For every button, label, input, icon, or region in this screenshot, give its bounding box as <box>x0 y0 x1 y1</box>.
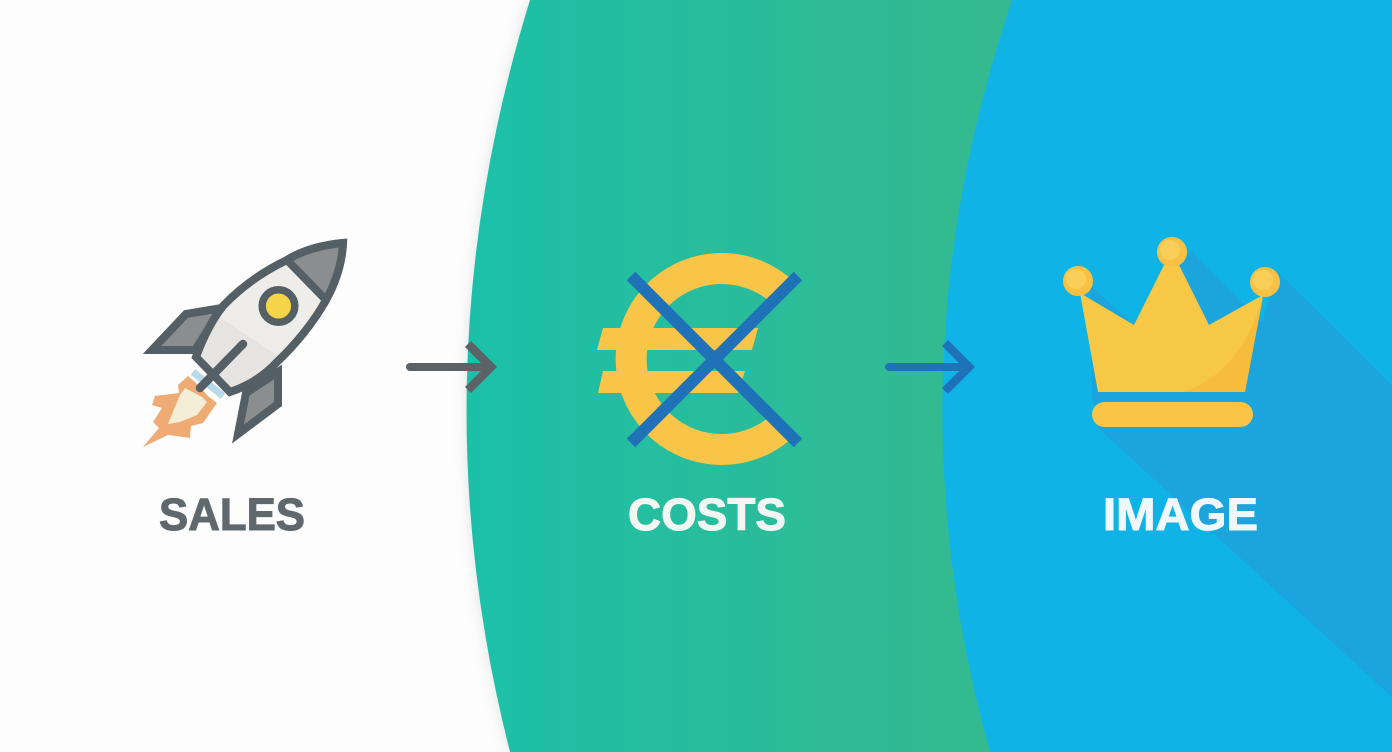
crown middle ball <box>1157 237 1187 267</box>
arrow: sales to costs <box>410 344 491 390</box>
panel: image band <box>942 0 1392 752</box>
crown band <box>1092 402 1253 427</box>
cross <box>631 276 798 443</box>
icon: crown <box>1063 237 1280 427</box>
label: sales: SALES <box>159 489 305 540</box>
rocket flame core <box>168 388 207 424</box>
panel: costs band <box>467 0 1392 752</box>
rocket right fin <box>238 372 278 434</box>
label: image: IMAGE <box>1103 489 1258 540</box>
rocket nose cone <box>287 243 343 300</box>
rocket body <box>196 243 343 392</box>
label: costs: COSTS <box>628 489 786 540</box>
crown body <box>1080 263 1263 392</box>
icon: rocket <box>143 243 343 447</box>
euro lower bar <box>598 371 745 393</box>
euro ring <box>631 268 779 450</box>
crown left ball <box>1063 266 1093 296</box>
crown long shadow <box>1090 250 1392 697</box>
rocket window <box>262 290 295 322</box>
icon: crossed-out euro <box>597 268 798 450</box>
euro upper bar <box>597 328 758 350</box>
rocket center line <box>200 344 243 388</box>
arrow: costs to image <box>889 343 969 391</box>
rocket flame <box>143 376 217 447</box>
panel: costs band edge shadow <box>467 0 700 752</box>
rocket left fin <box>152 308 222 350</box>
rocket exhaust glow <box>193 372 223 396</box>
crown right ball <box>1250 267 1280 297</box>
crown shaded area <box>1183 297 1263 392</box>
